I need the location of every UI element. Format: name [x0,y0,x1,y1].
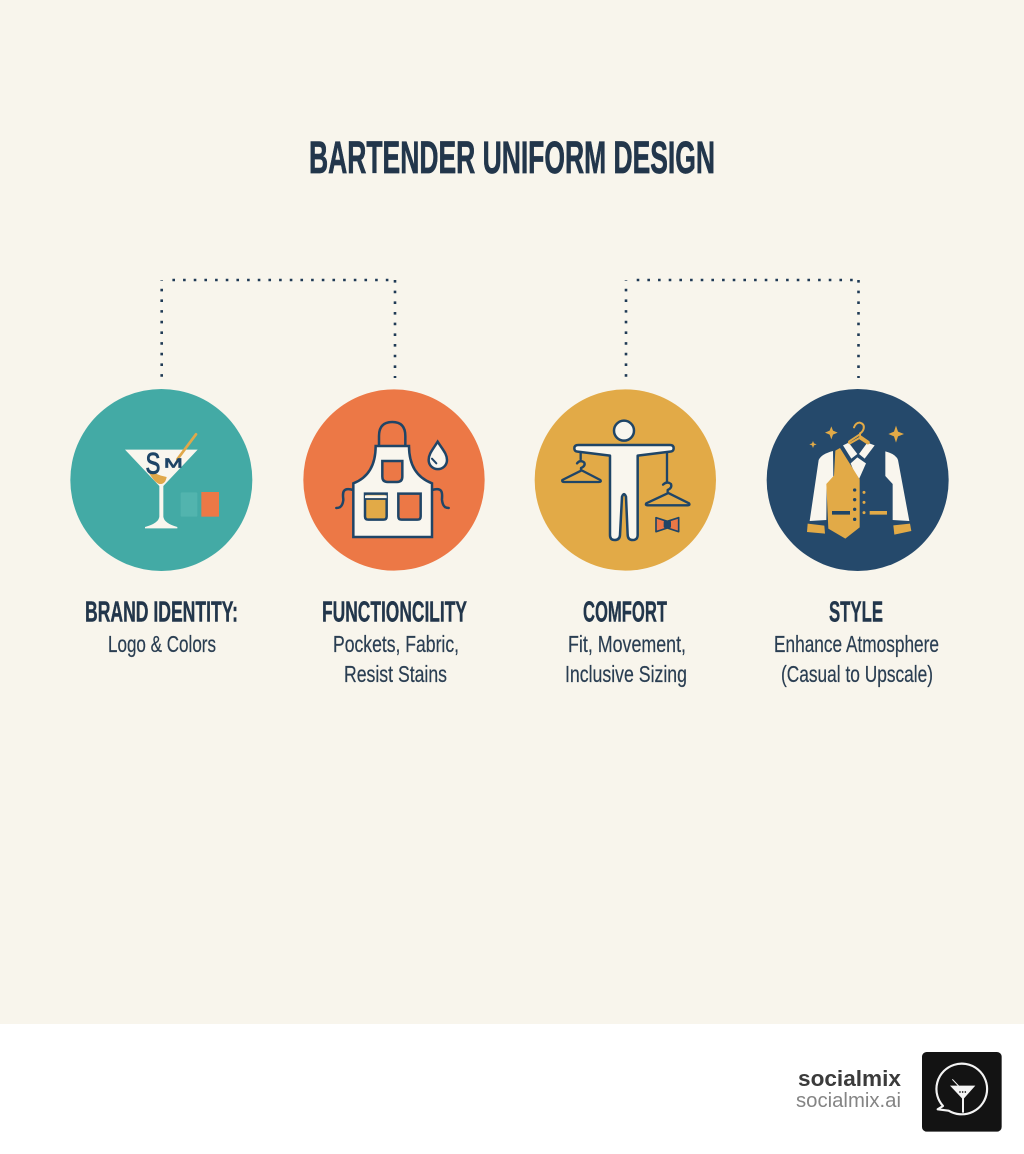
footer brand url: socialmix.ai [796,1090,901,1112]
icon: apron with pockets and water drop [303,389,485,571]
text: fit, movement, inclusive sizing [565,631,687,687]
heading: functioncility: FUNCTIONCILITY [322,596,467,628]
text: enhance atmosphere, casual to upscale [774,631,939,687]
panel: style [767,389,949,687]
text: logo and colors: Logo & Colors [108,631,216,657]
dotted connector: comfort to style [626,280,858,378]
text: pockets, fabric, resist stains: Pockets, Fabric, [333,631,459,657]
text: enhance atmosphere, casual to upscale: (Casual to Upscale) [781,661,933,687]
title: BARTENDER UNIFORM DESIGN [309,132,715,183]
text: pockets, fabric, resist stains [333,631,459,687]
dotted connector: brand identity to functionality [162,280,395,378]
panel: comfort [535,389,716,687]
icon: martini glass with logo and colour swatches: S [146,447,160,480]
icon: martini glass with logo and colour swatches: M [164,457,183,471]
text: enhance atmosphere, casual to upscale: Enhance Atmosphere [774,631,939,657]
icon: figure with hangers and bow tie [535,389,716,571]
panel: functionality [303,389,485,687]
text: pockets, fabric, resist stains: Resist Stains [344,661,447,687]
footer brand name: socialmix [798,1066,901,1091]
text: fit, movement, inclusive sizing: Inclusive Sizing [565,661,687,687]
heading: comfort: COMFORT [583,596,667,628]
icon: socialmix logo [922,1052,1002,1132]
text: fit, movement, inclusive sizing: Fit, Movement, [568,631,686,657]
icon: vest and shirt on hanger with sparkles [767,389,949,571]
icon: martini glass with logo and colour swatches [70,389,252,571]
heading: style: STYLE [829,596,883,628]
heading: brand identity: BRAND IDENTITY: [85,596,238,628]
panel: brand identity [70,389,252,657]
